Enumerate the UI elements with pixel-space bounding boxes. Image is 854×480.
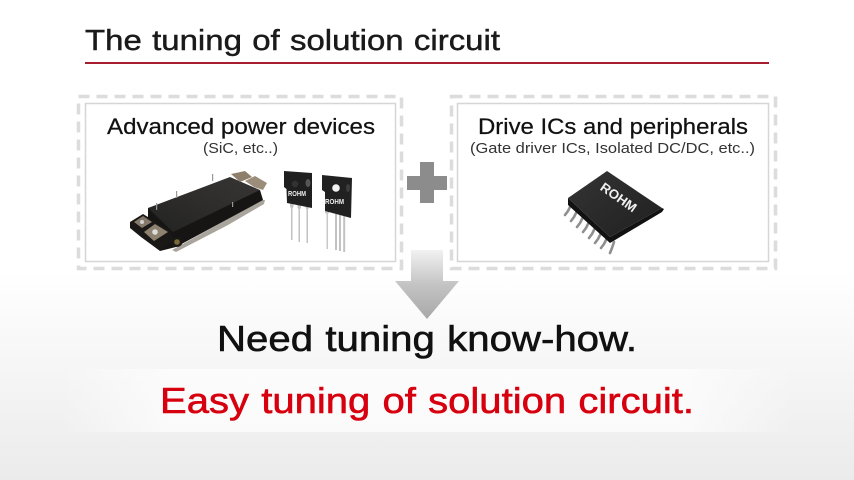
subheading: SiC: (SiC, etc..) <box>203 141 278 157</box>
panel: advanced power devices <box>78 96 402 268</box>
icon: power module <box>130 171 267 252</box>
arrow: down <box>395 250 459 319</box>
icon: 4-pin transistor: ROHM <box>325 197 344 206</box>
icon: ROHM IC chip: ROHM <box>597 179 640 215</box>
icon: plus sign <box>407 162 447 203</box>
subheading: gate drivers: (Gate driver ICs, Isolated DC/DC, etc..) <box>470 141 755 157</box>
title: The tuning of solution circuit <box>85 25 500 57</box>
icon: 4-pin transistor <box>322 175 352 252</box>
title underline <box>85 62 769 64</box>
statement: easy tuning: Easy tuning of solution circuit. <box>160 380 694 421</box>
highlight band <box>60 369 794 432</box>
icon: ROHM IC chip <box>565 171 664 253</box>
icon: 3-pin transistor <box>284 171 312 243</box>
heading: advanced power devices: Advanced power devices <box>107 114 375 139</box>
panel: drive ICs and peripherals <box>452 96 776 268</box>
heading: drive ICs: Drive ICs and peripherals <box>478 114 748 139</box>
icon: 3-pin transistor: ROHM <box>288 191 306 198</box>
statement: need tuning know-how: Need tuning know-how. <box>217 318 637 359</box>
page background <box>0 270 854 480</box>
